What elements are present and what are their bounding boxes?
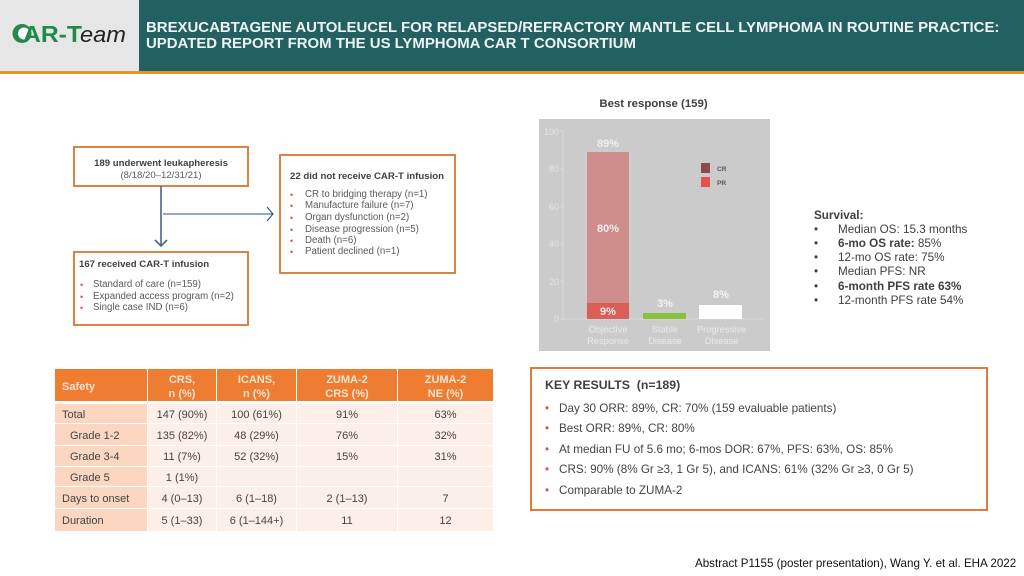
key results list: At median FU of 5.6 mo; 6-mos DOR: 67%, PFS: 63%, OS: 85% [559, 443, 893, 456]
key results list: • [545, 402, 549, 415]
logo panel [0, 0, 139, 71]
not received list: • [290, 225, 293, 235]
flow box: leukapheresis [73, 146, 249, 187]
chart heading: Best response (159) [599, 98, 708, 110]
leukapheresis text: 189 underwent leukapheresis [94, 158, 228, 169]
row: grade 3-4 [55, 446, 493, 466]
not received heading: 22 did not receive CAR-T infusion [290, 171, 444, 182]
survival text: • [814, 223, 818, 236]
key results list: • [545, 422, 549, 435]
bar chart: best response: 80 [549, 164, 559, 174]
table header: CRS (%) [325, 388, 369, 400]
row: grade 5: Grade 5 [70, 472, 110, 484]
table header: ICANS, [238, 374, 275, 386]
not received list [290, 189, 428, 257]
legend [701, 163, 727, 187]
key results list: • [545, 443, 549, 456]
row: total: Total [62, 408, 85, 420]
key results heading: KEY RESULTS (n=189) [545, 378, 680, 392]
key results list: Comparable to ZUMA-2 [559, 484, 682, 497]
header band [0, 0, 1024, 74]
safety table [55, 369, 493, 531]
row: grade 3-4: 31% [434, 451, 457, 463]
row: grade 3-4: 11 (7%) [163, 451, 201, 463]
x axis labels: Disease [648, 336, 682, 346]
row: days to onset: 4 (0–13) [162, 492, 202, 504]
row: total [55, 404, 493, 423]
row: total: 100 (61%) [231, 408, 282, 420]
received list: Expanded access program (n=2) [93, 291, 234, 302]
received list: • [80, 303, 83, 313]
bar chart: best response: 60 [549, 202, 559, 212]
table header: Safety [62, 381, 95, 393]
row: days to onset: 2 (1–13) [326, 492, 367, 504]
x axis labels: Objective [589, 324, 627, 334]
row: grade 1-2: Grade 1-2 [70, 430, 120, 442]
key results list: • [545, 484, 549, 497]
row: total: 63% [434, 408, 457, 420]
table header: ZUMA-2 [425, 374, 466, 386]
not received list: Organ dysfunction (n=2) [305, 212, 409, 223]
bar chart: best response [539, 119, 770, 351]
row: total: 147 (90%) [157, 408, 207, 420]
row: days to onset: 7 [442, 492, 449, 504]
row: grade 1-2: 48 (29%) [234, 430, 279, 442]
not received list: Patient declined (n=1) [305, 246, 400, 257]
survival text: 6-mo OS rate: 85% [838, 236, 941, 250]
row: duration [55, 509, 493, 531]
survival text: 6-month PFS rate 63% [838, 280, 961, 292]
key results list: CRS: 90% (8% Gr ≥3, 1 Gr 5), and ICANS: 61% (32% Gr ≥3, 0 Gr 5) [559, 463, 913, 476]
flow arrows [154, 186, 274, 247]
row: duration: Duration [62, 515, 104, 527]
row: grade 3-4: 52 (32%) [234, 451, 279, 463]
row: days to onset [55, 487, 493, 508]
survival text: 12-mo OS rate: 75% [838, 250, 945, 264]
bar: progressive disease: 8% [713, 289, 729, 301]
not received list: Manufacture failure (n=7) [305, 200, 414, 211]
row: grade 1-2: 135 (82%) [157, 430, 207, 442]
legend: PR [717, 180, 726, 187]
x axis labels: Stable [652, 324, 678, 334]
row: grade 3-4: Grade 3-4 [70, 451, 120, 463]
logo: CAR-Team [12, 21, 126, 47]
x axis labels: Progressive [697, 324, 746, 334]
key results list: • [545, 463, 549, 476]
table header: n (%) [169, 388, 195, 400]
bar: objective response: 9% [600, 306, 616, 318]
citation: Abstract P1155 (poster presentation), Wang Y. et al. EHA 2022 [695, 557, 1016, 570]
bar: progressive disease [699, 289, 742, 319]
row: grade 1-2: 76% [336, 430, 358, 442]
survival text: 12-month PFS rate 54% [838, 294, 963, 306]
row: duration: 6 (1–144+) [230, 515, 283, 527]
bar chart: best response: 20 [549, 277, 559, 287]
received list: Single case IND (n=6) [93, 302, 188, 313]
flow box: received infusion [73, 251, 249, 326]
not received list: • [290, 213, 293, 223]
bar: stable disease: 3% [657, 298, 673, 310]
table header: CRS, [169, 374, 195, 386]
row: duration: 5 (1–33) [162, 515, 202, 527]
bar: objective response: 80% [597, 223, 619, 235]
not received list: Death (n=6) [305, 235, 356, 246]
bar chart: best response: 0 [554, 314, 559, 324]
survival text: • [814, 280, 818, 292]
bar: objective response: 89% [597, 138, 619, 150]
leukapheresis text: (8/18/20–12/31/21) [120, 170, 202, 181]
x axis labels: Response [587, 336, 629, 346]
row: duration: 11 [341, 515, 353, 527]
survival text: Median OS: 15.3 months [838, 223, 967, 236]
survival text: Median PFS: NR [838, 265, 926, 278]
not received list: CR to bridging therapy (n=1) [305, 189, 428, 200]
bar chart: best response: 40 [549, 239, 559, 249]
row: days to onset: 6 (1–18) [236, 492, 277, 504]
key results list: Day 30 ORR: 89%, CR: 70% (159 evaluable patients) [559, 402, 836, 415]
survival text: • [814, 294, 818, 306]
x axis labels [587, 324, 746, 346]
logo: CAR-Team: eam [80, 22, 126, 47]
survival text: • [814, 236, 818, 250]
table header: ZUMA-2 [326, 374, 368, 386]
key results list [545, 402, 913, 497]
not received list: Disease progression (n=5) [305, 224, 419, 235]
not received list: • [290, 201, 293, 211]
bar: objective response [587, 138, 629, 319]
header accent line [0, 71, 1024, 74]
leukapheresis text [94, 158, 228, 181]
received heading: 167 received CAR-T infusion [79, 259, 209, 270]
survival text: • [814, 265, 818, 278]
title: UPDATED REPORT FROM THE US LYMPHOMA CAR T CONSORTIUM [146, 34, 636, 52]
legend: CR [717, 166, 727, 173]
row: grade 1-2: 32% [434, 430, 457, 442]
row: duration: 12 [439, 515, 452, 527]
x axis labels: Disease [705, 336, 738, 346]
table header: NE (%) [428, 388, 463, 400]
title [146, 19, 999, 52]
received list: • [80, 292, 83, 302]
row: grade 5 [55, 467, 493, 486]
panel: key results [530, 367, 988, 511]
logo: CAR-Team: AR-T [23, 21, 82, 47]
row: grade 3-4: 15% [336, 451, 358, 463]
row: grade 5: 1 (1%) [166, 472, 198, 484]
survival text [814, 208, 967, 306]
received list: Standard of care (n=159) [93, 279, 201, 290]
not received list: • [290, 190, 293, 200]
row: days to onset: Days to onset [62, 492, 129, 504]
survival text: • [814, 250, 818, 264]
table header [55, 369, 493, 401]
bar: stable disease [643, 298, 686, 319]
survival text: Survival: [814, 208, 863, 222]
received list [80, 279, 234, 313]
row: grade 1-2 [55, 424, 493, 445]
received list: • [80, 280, 83, 290]
not received list: • [290, 236, 293, 246]
not received list: • [290, 247, 293, 257]
bar chart: best response: 100 [544, 127, 559, 137]
key results list: Best ORR: 89%, CR: 80% [559, 422, 695, 435]
title: BREXUCABTAGENE AUTOLEUCEL FOR RELAPSED/REFRACTORY MANTLE CELL LYMPHOMA IN ROUTINE PRACTICE: [146, 19, 999, 36]
row: total: 91% [336, 408, 358, 420]
flow box: did not receive infusion [279, 154, 456, 274]
title panel [139, 0, 1024, 71]
table header: n (%) [243, 388, 270, 400]
